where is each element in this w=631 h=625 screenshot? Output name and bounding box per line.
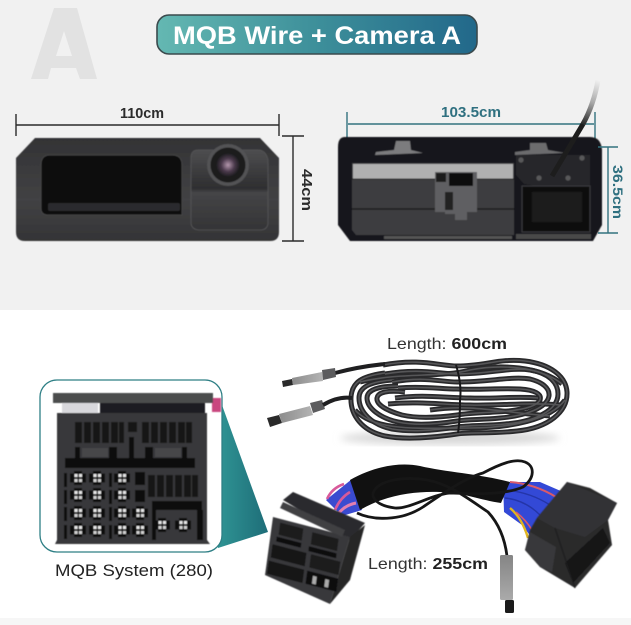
label: length 255cm: Length: 255cm: [368, 556, 488, 573]
lower cable lead and plug: [267, 398, 352, 427]
inset upper pin rows: [75, 422, 192, 443]
connector inset: [40, 380, 222, 552]
inset small pin grid: [148, 475, 198, 497]
inset connector body: [53, 393, 221, 544]
bottom shade: [0, 618, 631, 625]
harness plug silver: [500, 555, 514, 613]
camera handle rear view: [338, 137, 602, 241]
camera housing: [191, 150, 268, 230]
title pill: MQB Wire + Camera A: [173, 22, 461, 50]
label: MQB System: MQB System (280): [55, 561, 213, 580]
bottom panel background: [0, 310, 631, 625]
left block connector: [265, 492, 365, 604]
camera cable: [552, 80, 598, 176]
label: length 600cm: Length: 600cm: [387, 336, 507, 353]
rear cover plate: [352, 163, 514, 235]
dimension: 103.5cm width: 103.5cm: [441, 104, 501, 121]
center latch: [435, 172, 477, 220]
upper cable lead and plug: [282, 364, 385, 387]
top panel background: [0, 0, 631, 310]
camera mount: [516, 155, 590, 196]
dimension: 110cm width: 110cm: [120, 106, 164, 122]
title pill: [157, 15, 477, 54]
black camera wire loop: [357, 461, 532, 556]
inset lower grid: [64, 472, 203, 540]
rear clips: [375, 141, 423, 155]
harness cable: [265, 461, 617, 613]
camera lens: [207, 144, 249, 186]
wire bundles: [326, 479, 570, 538]
dimension: 44cm height: 44cm: [298, 169, 314, 211]
teal zoom wedge: [218, 394, 268, 548]
dimension: 36.5cm height: 36.5cm: [610, 165, 626, 219]
cable shadow: [340, 431, 560, 445]
inset terminals: [70, 471, 191, 537]
coiled extension cable: [267, 360, 567, 445]
right block connector: [525, 482, 617, 588]
sleeved wire bundle: [350, 465, 510, 510]
handle recess: [41, 155, 182, 215]
inset horizontal slot: [65, 437, 195, 468]
dimension: 44cm height: [282, 136, 314, 241]
dimension: 36.5cm height: [598, 147, 626, 233]
cable tie: [456, 365, 460, 433]
camera handle front view: [16, 138, 279, 241]
left connector face pins: [267, 521, 343, 592]
watermark letter A: [31, 8, 97, 79]
